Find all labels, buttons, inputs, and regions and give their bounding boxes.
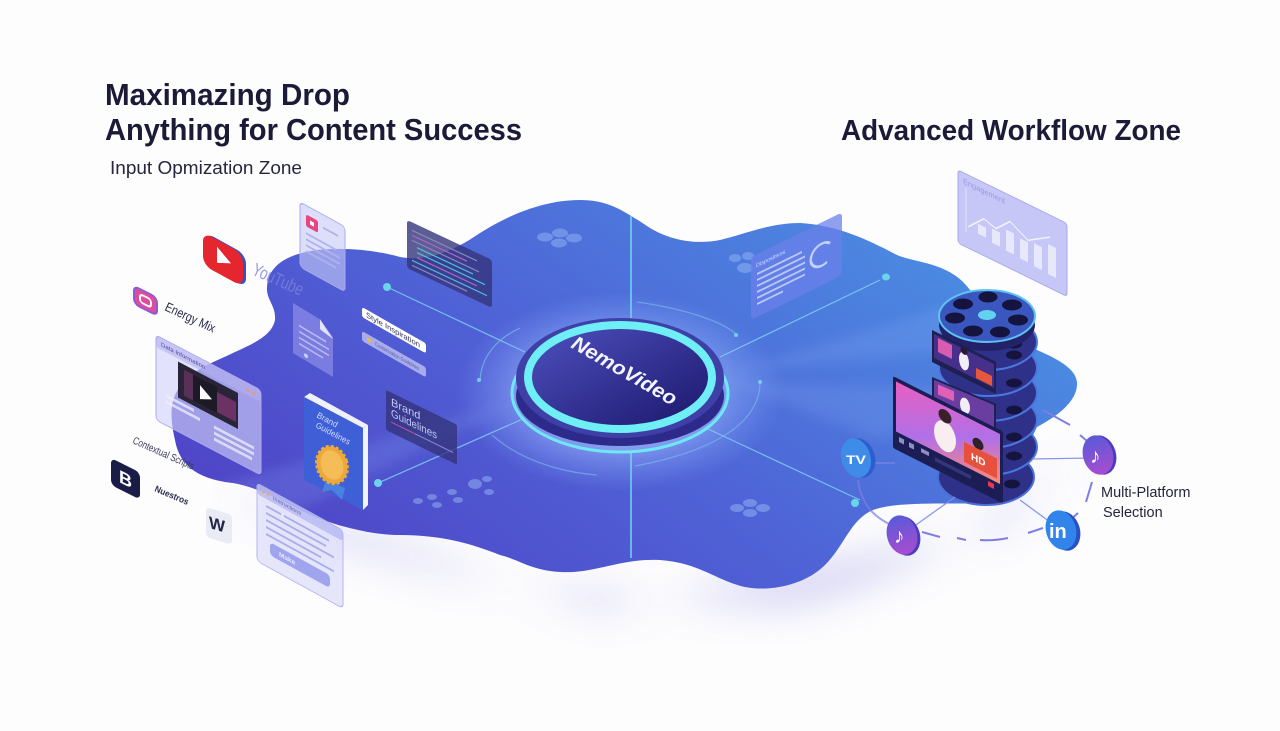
dark B icon xyxy=(111,458,140,500)
dashed platform ring xyxy=(858,410,1092,540)
TikTok icon left xyxy=(882,512,925,559)
Multi-Platform Selection label: Multi-Platform xyxy=(1101,485,1190,501)
decorative dot clusters xyxy=(413,228,770,517)
subtitle: Input Opmization Zone xyxy=(110,158,302,178)
video window card: Data Information xyxy=(161,341,206,371)
secondary pill xyxy=(362,331,426,377)
code panel xyxy=(407,220,492,308)
right doc card xyxy=(751,212,842,320)
TV platform icon: TV xyxy=(846,453,866,467)
central platform blob xyxy=(172,200,1077,589)
LinkedIn icon: in xyxy=(1049,521,1067,543)
engagement chart card xyxy=(958,170,1067,296)
brand guidelines book: Brand xyxy=(315,410,340,430)
Energy Mix label: Energy Mix xyxy=(163,299,218,336)
form card: Instructions xyxy=(273,496,301,517)
brand guidelines dark panel: Brand xyxy=(391,396,420,423)
Nuestros label: Nuestros xyxy=(153,484,190,507)
TikTok icon right xyxy=(1078,432,1121,478)
small video screen 1 xyxy=(932,330,996,394)
YouTube label: YouTube xyxy=(249,259,307,300)
V icon xyxy=(206,507,232,545)
brand guidelines book xyxy=(304,393,368,510)
film reel stack xyxy=(938,290,1037,505)
brand guidelines dark panel xyxy=(386,390,457,465)
main title: Maximazing Drop xyxy=(105,77,350,112)
connector lines xyxy=(378,280,880,500)
Contextual Scripts label: Contextual Scripts xyxy=(131,435,196,473)
icon: award seal xyxy=(312,442,352,500)
right heading: Advanced Workflow Zone xyxy=(841,115,1181,147)
platform connectors xyxy=(870,458,1090,527)
brand guidelines book: Guidelines xyxy=(314,420,352,447)
TikTok icon left: ♪ xyxy=(894,525,904,548)
TikTok icon right: ♪ xyxy=(1090,445,1100,468)
Instagram style icon xyxy=(134,286,157,316)
central NemoVideo disc xyxy=(455,292,785,492)
Multi-Platform Selection label xyxy=(1101,485,1190,521)
right doc card: Dispositivos xyxy=(756,249,785,269)
light beams xyxy=(226,311,941,508)
main title: Anything for Content Success xyxy=(105,112,522,147)
form card xyxy=(257,483,343,608)
main title xyxy=(105,77,522,147)
disc label: NemoVideo xyxy=(568,332,681,410)
YouTube icon xyxy=(203,231,246,289)
file card xyxy=(293,303,333,377)
secondary pill: Customization Guidelines xyxy=(375,342,419,372)
engagement chart card: Engagement xyxy=(963,176,1006,206)
large video screen xyxy=(893,376,1003,504)
reel stack body xyxy=(938,314,1037,505)
brand guidelines dark panel: Guidelines xyxy=(391,407,437,442)
large video screen: HD xyxy=(971,451,986,470)
dark B icon: B xyxy=(119,467,132,493)
LinkedIn icon xyxy=(1041,507,1085,554)
form card: Make xyxy=(279,551,295,567)
blob shadow xyxy=(230,440,1090,610)
reel top xyxy=(939,290,1035,351)
floating doc card xyxy=(300,202,345,292)
connector nodes xyxy=(374,274,890,507)
TV platform icon xyxy=(837,435,880,481)
center divider line xyxy=(630,216,632,558)
V icon: W xyxy=(209,512,226,537)
small video screen 2 xyxy=(932,377,996,429)
style inspiration pill: Style Inspiration xyxy=(366,310,420,350)
Multi-Platform Selection label: Selection xyxy=(1103,505,1163,521)
video window card xyxy=(156,335,261,475)
